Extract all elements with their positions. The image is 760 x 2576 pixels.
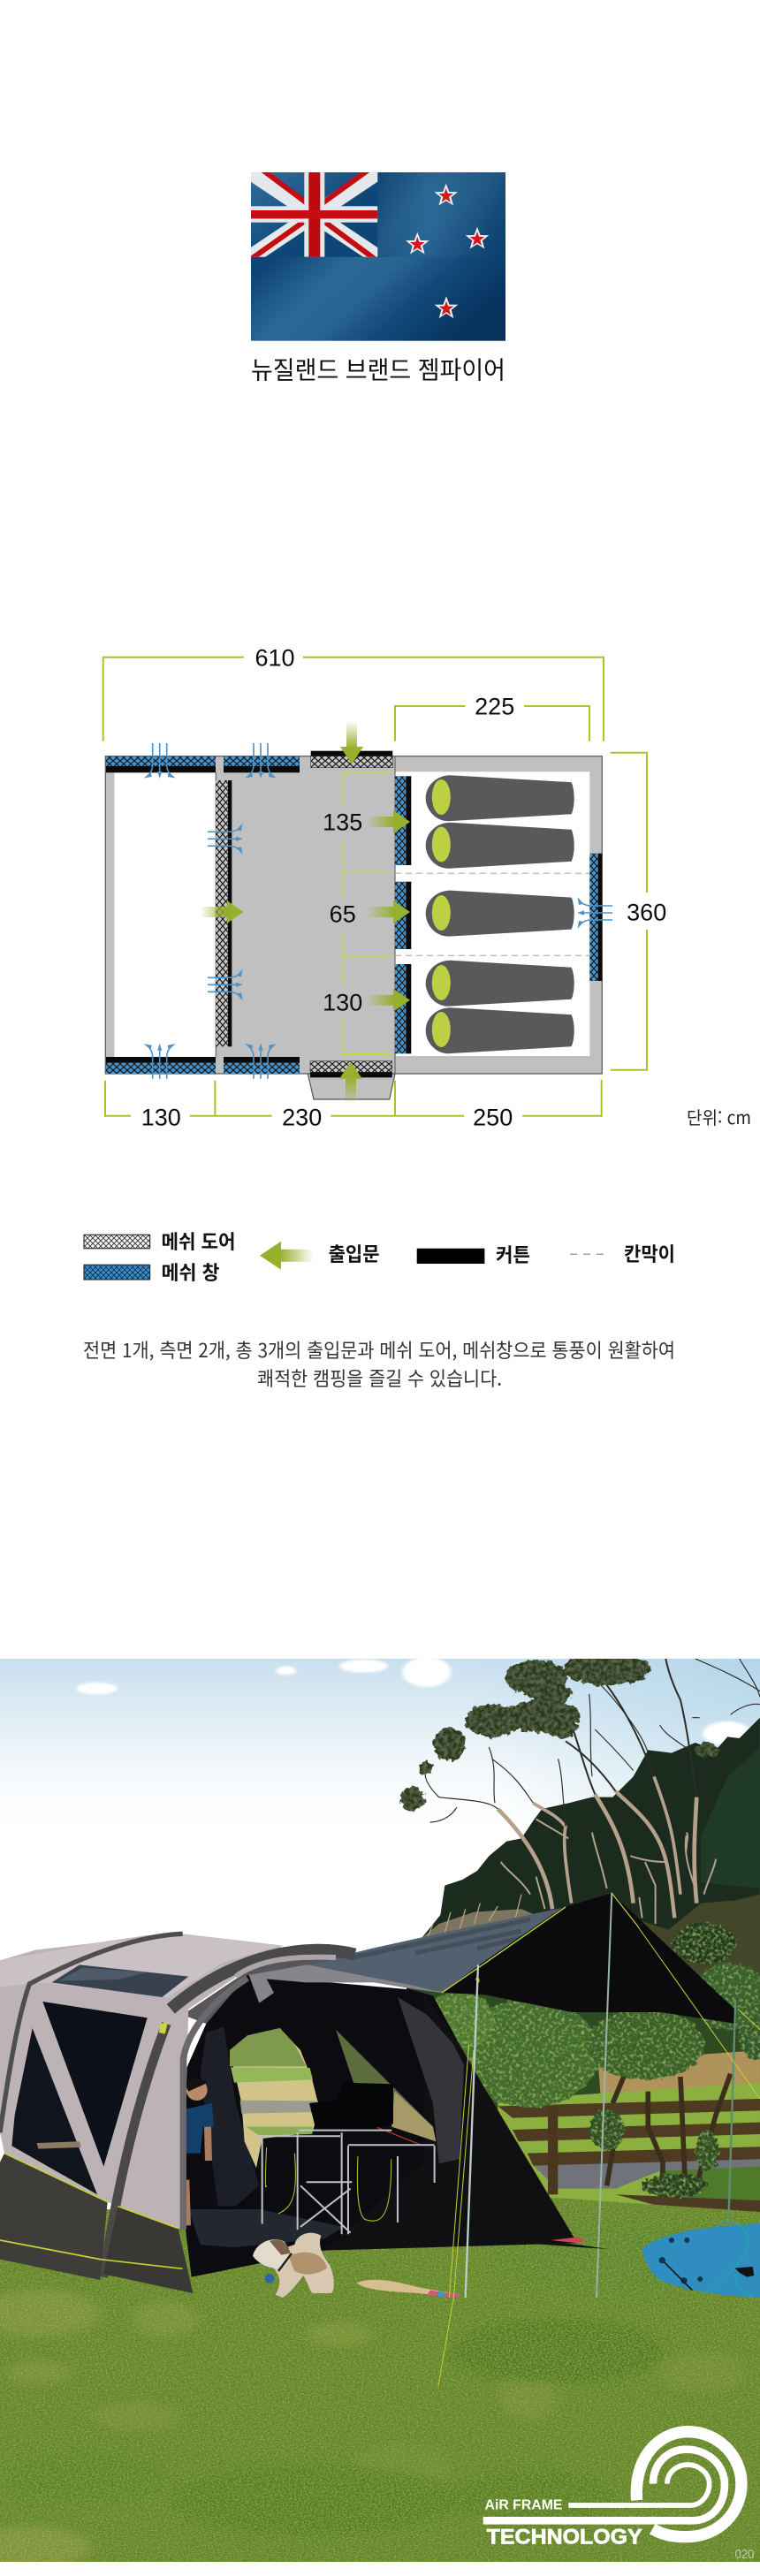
- flag caption: 뉴질랜드 브랜드 젬파이어: [251, 352, 505, 387]
- legend: curtain: [417, 1240, 530, 1268]
- camp tables and chair: [258, 2131, 435, 2234]
- logo spiral mark: [483, 2432, 741, 2537]
- flag stars: [406, 184, 489, 318]
- awning black side panel: [442, 1893, 736, 2024]
- tree canopies: [400, 1653, 718, 1811]
- tent body: [0, 1934, 577, 2293]
- floor plan diagram: [103, 645, 666, 1131]
- sleeping bags: [426, 775, 574, 1053]
- inner dimension: 135: 135: [323, 809, 362, 836]
- description text: 쾌적한 캠핑을 즐길 수 있습니다.: [257, 1364, 502, 1392]
- tree branches: [425, 1659, 760, 1827]
- logo: Air Frame Technology: [483, 2432, 741, 2549]
- legend: curtain: 커튼: [496, 1240, 530, 1268]
- dog: [253, 2233, 334, 2298]
- tent outer walls: [0, 1934, 355, 2293]
- guy rope upper: [612, 1893, 638, 1926]
- legend: mesh window: [84, 1258, 219, 1286]
- tent entrance interior: [183, 1947, 577, 2277]
- legend: entrance: [260, 1239, 380, 1270]
- legend: mesh window: 메쉬 창: [161, 1258, 219, 1286]
- tent floor sheet: [188, 2209, 345, 2247]
- dimension: 610: 610: [255, 645, 295, 672]
- legend: [84, 1227, 675, 1286]
- unit note: 단위: cm: [687, 1104, 751, 1129]
- inner dimension: 130: 130: [323, 990, 362, 1016]
- entrance arrows: [201, 721, 410, 1104]
- lawn: [0, 2198, 760, 2568]
- dimension: 230: 230: [282, 1105, 322, 1131]
- flag canton: Union Jack: [251, 172, 378, 257]
- mesh door: bottom: [310, 1061, 392, 1077]
- legend: mesh door: [84, 1227, 235, 1255]
- page number: 020: [735, 2547, 755, 2562]
- mesh door: side: [216, 780, 232, 1046]
- awning front fold: [249, 1964, 442, 2003]
- inner dimension lines: [343, 772, 391, 1054]
- inner dimension: 65: 65: [330, 901, 356, 928]
- blue surfboard: [642, 2221, 760, 2298]
- mesh window: right: [589, 854, 602, 981]
- background bushes fence and lawn: [415, 1924, 760, 2215]
- dimension: 130: 130: [141, 1105, 181, 1131]
- mesh window: bottom left: [106, 1057, 216, 1074]
- sky: [0, 1659, 760, 1810]
- mesh door: top: [311, 751, 392, 768]
- porch: [308, 1074, 395, 1099]
- cricket bat: [356, 2280, 460, 2299]
- mesh window: top middle: [224, 756, 300, 772]
- view through entrance: [230, 2028, 436, 2168]
- legend: mesh door: 메쉬 도어: [161, 1227, 235, 1255]
- legend: entrance: 출입문: [329, 1239, 380, 1267]
- logo text: AIR FRAME: AiR FRAME: [484, 2497, 562, 2513]
- photo: tent on grass: [0, 1653, 760, 2568]
- airflow arrows: [144, 743, 612, 1079]
- awning poles and guy ropes: [438, 1893, 760, 2386]
- description text: 전면 1개, 측면 2개, 총 3개의 출입문과 메쉬 도어, 메쉬창으로 통풍이 원활하여: [83, 1335, 675, 1364]
- mesh window: top left: [106, 756, 216, 772]
- outer dimension lines: [103, 657, 647, 1116]
- legend: partition: 칸막이: [624, 1239, 675, 1267]
- mesh window: bottom middle: [224, 1057, 300, 1074]
- child in doorway: [186, 2078, 214, 2225]
- tree trunks: [427, 1776, 716, 1939]
- dimension: 250: 250: [473, 1105, 513, 1131]
- description text: [83, 1335, 675, 1392]
- awning roof: [249, 1893, 612, 2000]
- dimension: 360: 360: [627, 900, 666, 926]
- camp stove: [309, 2083, 420, 2145]
- logo text: TECHNOLOGY: TECHNOLOGY: [487, 2526, 642, 2549]
- inner room partition dashes: [395, 873, 589, 955]
- dimension: 225: 225: [475, 694, 514, 720]
- bedroom mesh doors: [395, 776, 411, 1053]
- icon: New Zealand flag: [247, 168, 505, 341]
- tent peg strap: [539, 2238, 608, 2249]
- hillside and trees: [400, 1653, 760, 2012]
- tent floor base: [105, 756, 602, 1074]
- tent right wall: [324, 1995, 577, 2251]
- legend: partition: [570, 1239, 675, 1267]
